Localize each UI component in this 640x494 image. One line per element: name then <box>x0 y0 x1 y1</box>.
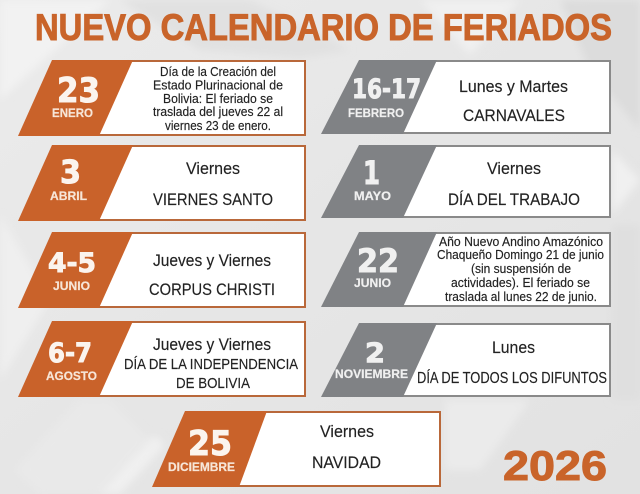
description: CARNAVALES <box>463 106 565 125</box>
panel: 6-7 agosto: AGOSTO <box>46 371 97 383</box>
panel: 6-7 agosto <box>18 321 305 397</box>
panel: 3 abril <box>18 145 305 221</box>
description: CORPUS CHRISTI <box>149 280 275 299</box>
description: NAVIDAD <box>312 453 381 472</box>
panel: 2 noviembre: NOVIEMBRE <box>335 369 408 381</box>
panel: 22 junio <box>321 232 610 307</box>
panel: 16-17 febrero: FEBRERO <box>348 108 404 120</box>
panel: 1 mayo: 1 <box>363 154 380 192</box>
panel: 16-17 febrero <box>321 60 610 134</box>
description: DÍA DE LA INDEPENDENCIA <box>124 356 298 373</box>
panel: 6-7 agosto: 6-7 <box>48 338 92 369</box>
year: 2026 <box>503 442 607 489</box>
panel: 1 mayo <box>321 145 610 218</box>
panel: 22 junio: 22 <box>357 242 399 280</box>
description: Día de la Creación del <box>160 65 276 79</box>
description: Viernes <box>487 159 541 178</box>
description <box>448 159 580 209</box>
description: Bolivia: El feriado se <box>163 92 273 106</box>
panel: 25 diciembre: DICIEMBRE <box>168 462 235 474</box>
panel: 23 enero: 23 <box>57 71 100 111</box>
description: Viernes <box>186 159 240 178</box>
panel: 16-17 febrero: 16-17 <box>352 74 421 105</box>
description: Viernes <box>320 422 374 441</box>
description <box>312 422 381 472</box>
panel: 25 diciembre <box>152 411 440 487</box>
description: Año Nuevo Andino Amazónico <box>439 235 603 249</box>
panel: 4-5 junio: 4-5 <box>48 248 96 279</box>
description: Chaqueño Domingo 21 de junio <box>437 248 604 262</box>
description: Lunes y Martes <box>459 77 568 96</box>
description <box>124 335 298 392</box>
description <box>153 159 273 209</box>
description: DE BOLIVIA <box>176 376 250 392</box>
description: traslada del jueves 22 al <box>153 105 283 119</box>
description: DÍA DE TODOS LOS DIFUNTOS <box>417 370 607 387</box>
description: viernes 23 de enero. <box>165 119 271 133</box>
panel: 2 noviembre: 2 <box>365 338 385 369</box>
panel: 2 noviembre <box>321 323 610 397</box>
panel: 23 enero <box>18 60 305 136</box>
description <box>153 65 283 133</box>
description <box>417 338 607 387</box>
description <box>459 77 568 125</box>
description <box>149 251 275 299</box>
panel: 1 mayo: MAYO <box>354 191 391 203</box>
description: VIERNES SANTO <box>153 190 273 209</box>
panel: 4-5 junio: JUNIO <box>53 281 90 293</box>
description: Jueves y Viernes <box>153 335 271 354</box>
description: actividades). El feriado se <box>451 276 590 290</box>
description: Lunes <box>492 338 535 357</box>
panel: 23 enero: ENERO <box>52 108 93 120</box>
panel: 4-5 junio <box>18 232 305 308</box>
description <box>437 235 604 304</box>
description: Estado Plurinacional de <box>153 78 283 92</box>
panel: 22 junio: JUNIO <box>354 278 391 290</box>
panel: 25 diciembre: 25 <box>188 424 232 464</box>
description: (sin suspensión de <box>471 262 571 276</box>
description: Jueves y Viernes <box>153 251 271 270</box>
panel: 3 abril: ABRIL <box>50 191 87 203</box>
description: DÍA DEL TRABAJO <box>448 190 580 209</box>
description: traslada al lunes 22 de junio. <box>445 290 597 304</box>
panel: 3 abril: 3 <box>60 153 81 191</box>
